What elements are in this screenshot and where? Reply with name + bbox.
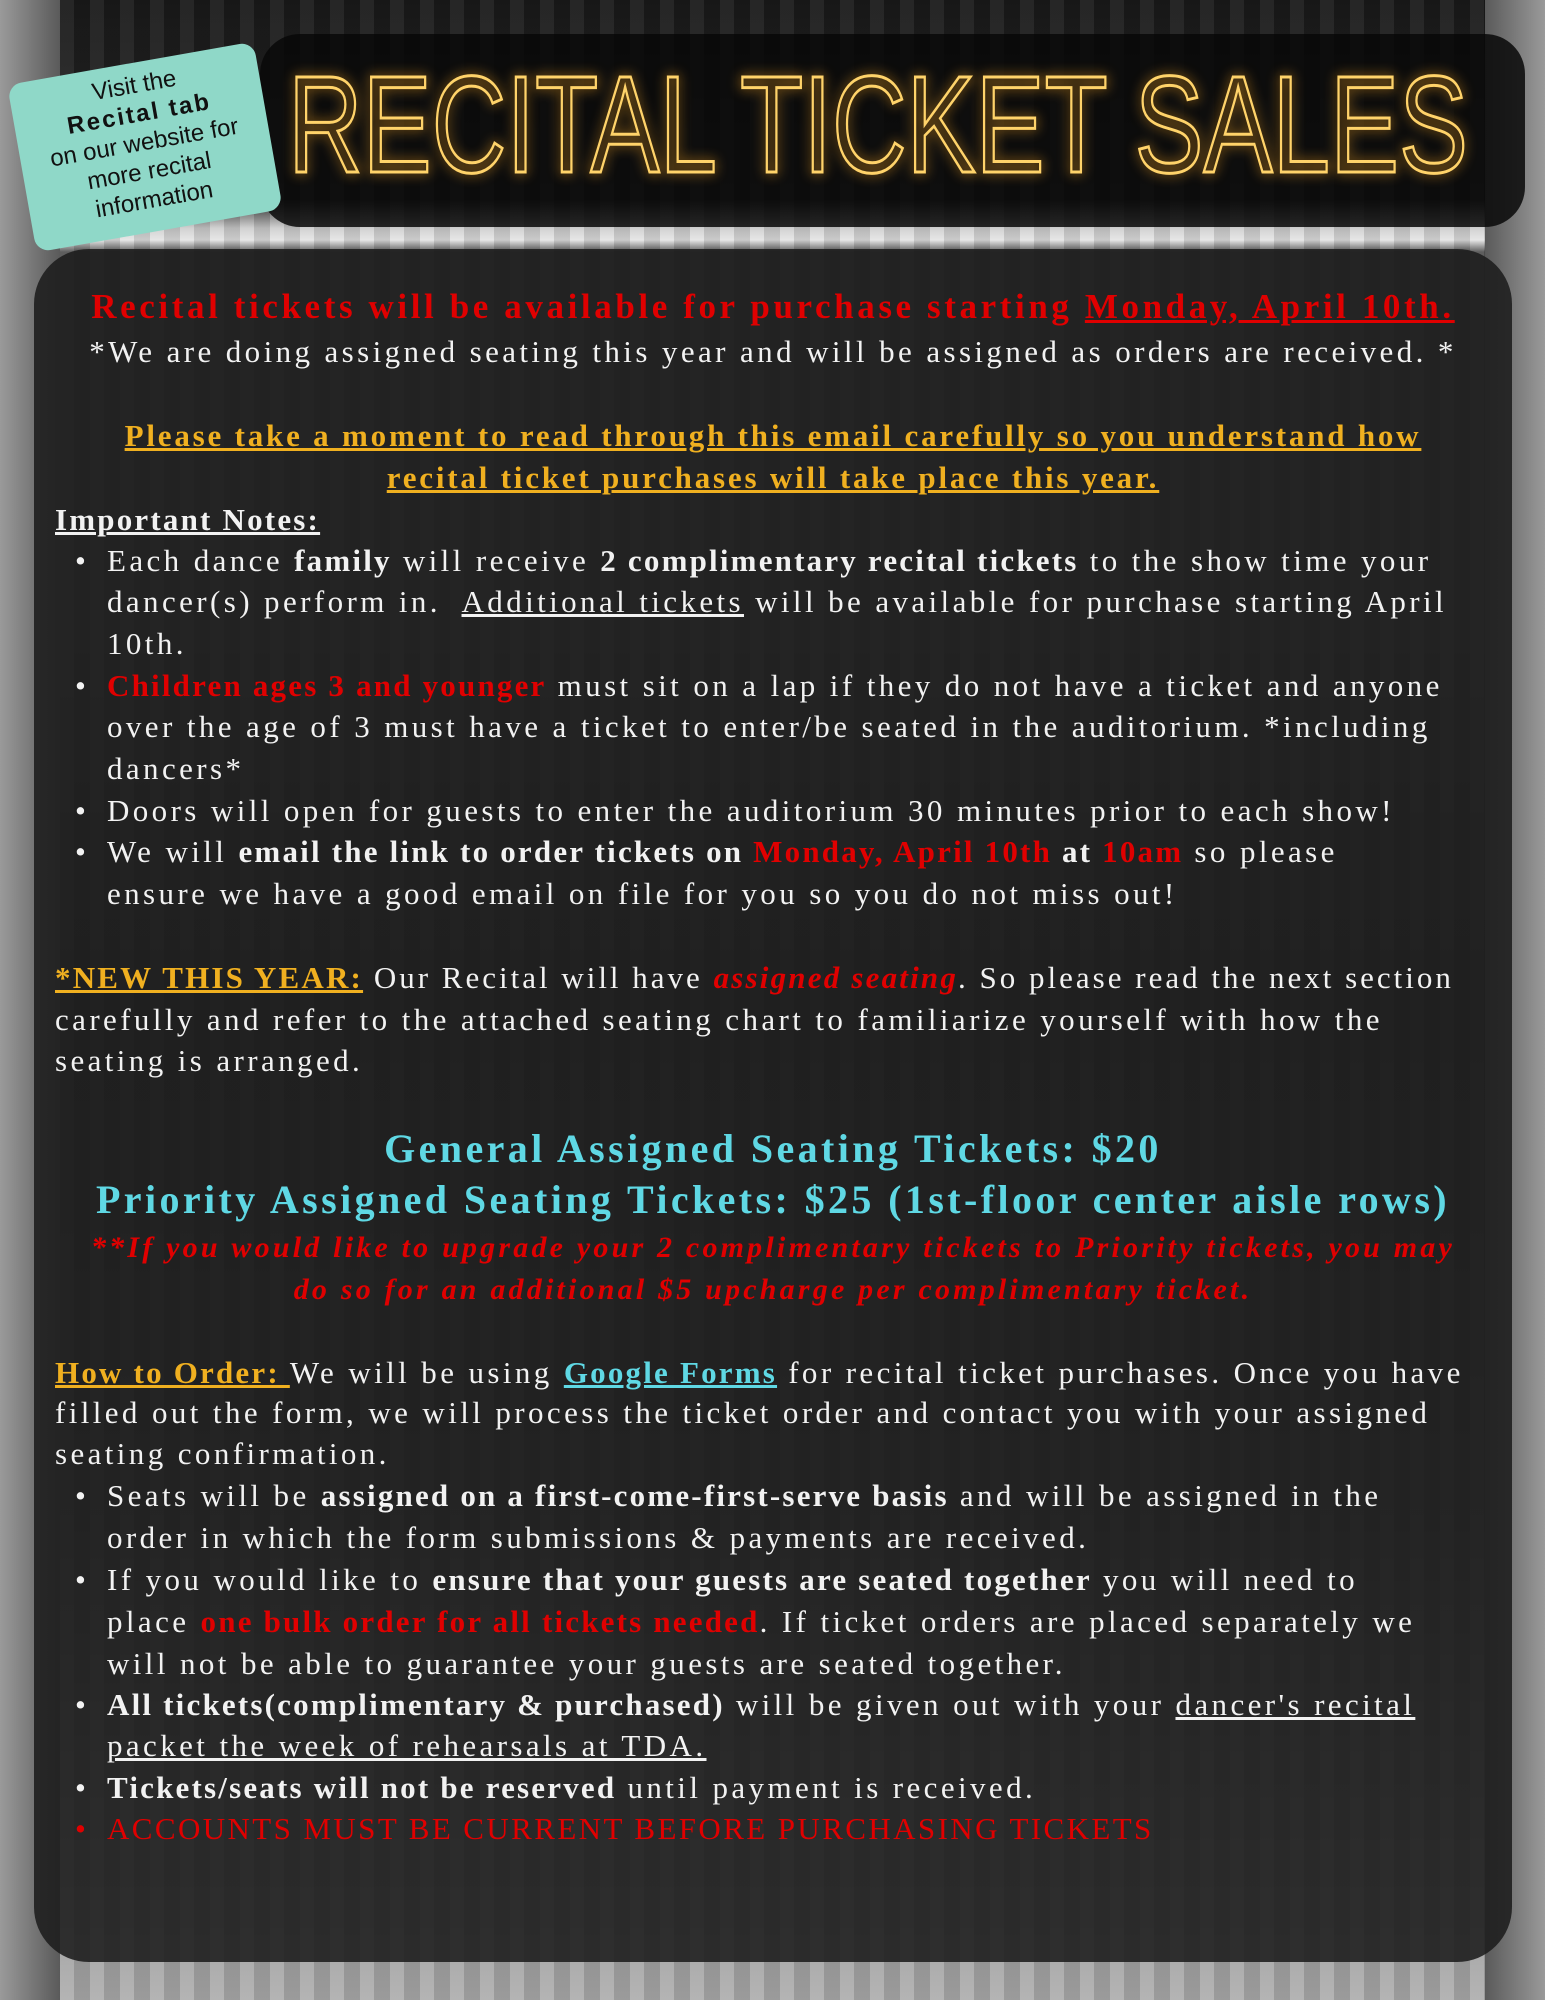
text: ACCOUNTS MUST BE CURRENT BEFORE PURCHASING TICKETS: [107, 1811, 1154, 1846]
text: recital ticket purchases will take place this year.: [387, 460, 1159, 495]
sticky note: more recital: [85, 147, 213, 195]
how to order: [55, 1355, 1464, 1846]
text: seating confirmation.: [55, 1436, 390, 1471]
sticky note: [7, 42, 283, 252]
sticky note: information: [93, 176, 215, 223]
text: **If you would like to upgrade your 2 complimentary tickets to Priority tickets, you may: [91, 1231, 1455, 1264]
text: Tickets/seats will not be reserved until payment is received.: [107, 1770, 1036, 1805]
text: Children ages 3 and younger must sit on a lap if they do not have a ticket and anyone: [107, 668, 1443, 703]
text block: intro: [89, 287, 1457, 495]
text: Each dance family will receive 2 complimentary recital tickets to the show time your: [107, 543, 1431, 578]
sticky note: Visit the: [90, 65, 178, 106]
text: Recital tickets will be available for purchase starting Monday, April 10th.: [91, 287, 1455, 326]
text: We will email the link to order tickets on Monday, April 10th at 10am so please: [107, 834, 1338, 869]
text: All tickets(complimentary & purchased) will be given out with your dancer's recital: [107, 1687, 1415, 1722]
sticky note: Recital tab: [65, 88, 213, 140]
text: dancers*: [107, 751, 244, 786]
sticky note: on our website for: [48, 113, 241, 172]
text: Please take a moment to read through this email carefully so you understand how: [125, 418, 1421, 453]
text: order in which the form submissions & payments are received.: [107, 1520, 1089, 1555]
new this year: [55, 960, 1454, 1078]
text: ensure we have a good email on file for you so you do not miss out!: [107, 876, 1178, 911]
text: Seats will be assigned on a first-come-first-serve basis and will be assigned in the: [107, 1478, 1381, 1513]
text: carefully and refer to the attached seating chart to familiarize yourself with how the: [55, 1002, 1383, 1037]
text: packet the week of rehearsals at TDA.: [107, 1728, 706, 1763]
text: seating is arranged.: [55, 1043, 363, 1078]
text: Doors will open for guests to enter the auditorium 30 minutes prior to each show!: [107, 793, 1395, 828]
text: If you would like to ensure that your guests are seated together you will need to: [107, 1562, 1358, 1597]
important notes list: [55, 502, 1447, 911]
text: Important Notes:: [55, 502, 320, 537]
text: General Assigned Seating Tickets: $20: [384, 1126, 1162, 1171]
text: over the age of 3 must have a ticket to enter/be seated in the auditorium. *including: [107, 709, 1431, 744]
text: dancer(s) perform in. Additional tickets will be available for purchase starting April: [107, 584, 1447, 619]
text: place one bulk order for all tickets needed. If ticket orders are placed separately we: [107, 1604, 1415, 1639]
pricing: [91, 1126, 1455, 1306]
text: 10th.: [107, 626, 187, 661]
text: How to Order: We will be using Google Forms for recital ticket purchases. Once you have: [55, 1355, 1464, 1390]
header bar: [260, 34, 1525, 227]
text: filled out the form, we will process the ticket order and contact you with your assigned: [55, 1395, 1430, 1430]
text: will not be able to guarantee your guests are seated together.: [107, 1646, 1066, 1681]
text: do so for an additional $5 upcharge per complimentary ticket.: [294, 1273, 1252, 1306]
text: *We are doing assigned seating this year and will be assigned as orders are received. *: [89, 334, 1457, 369]
text: Priority Assigned Seating Tickets: $25 (1st-floor center aisle rows): [96, 1177, 1450, 1222]
text: *NEW THIS YEAR: Our Recital will have assigned seating. So please read the next section: [55, 960, 1454, 995]
